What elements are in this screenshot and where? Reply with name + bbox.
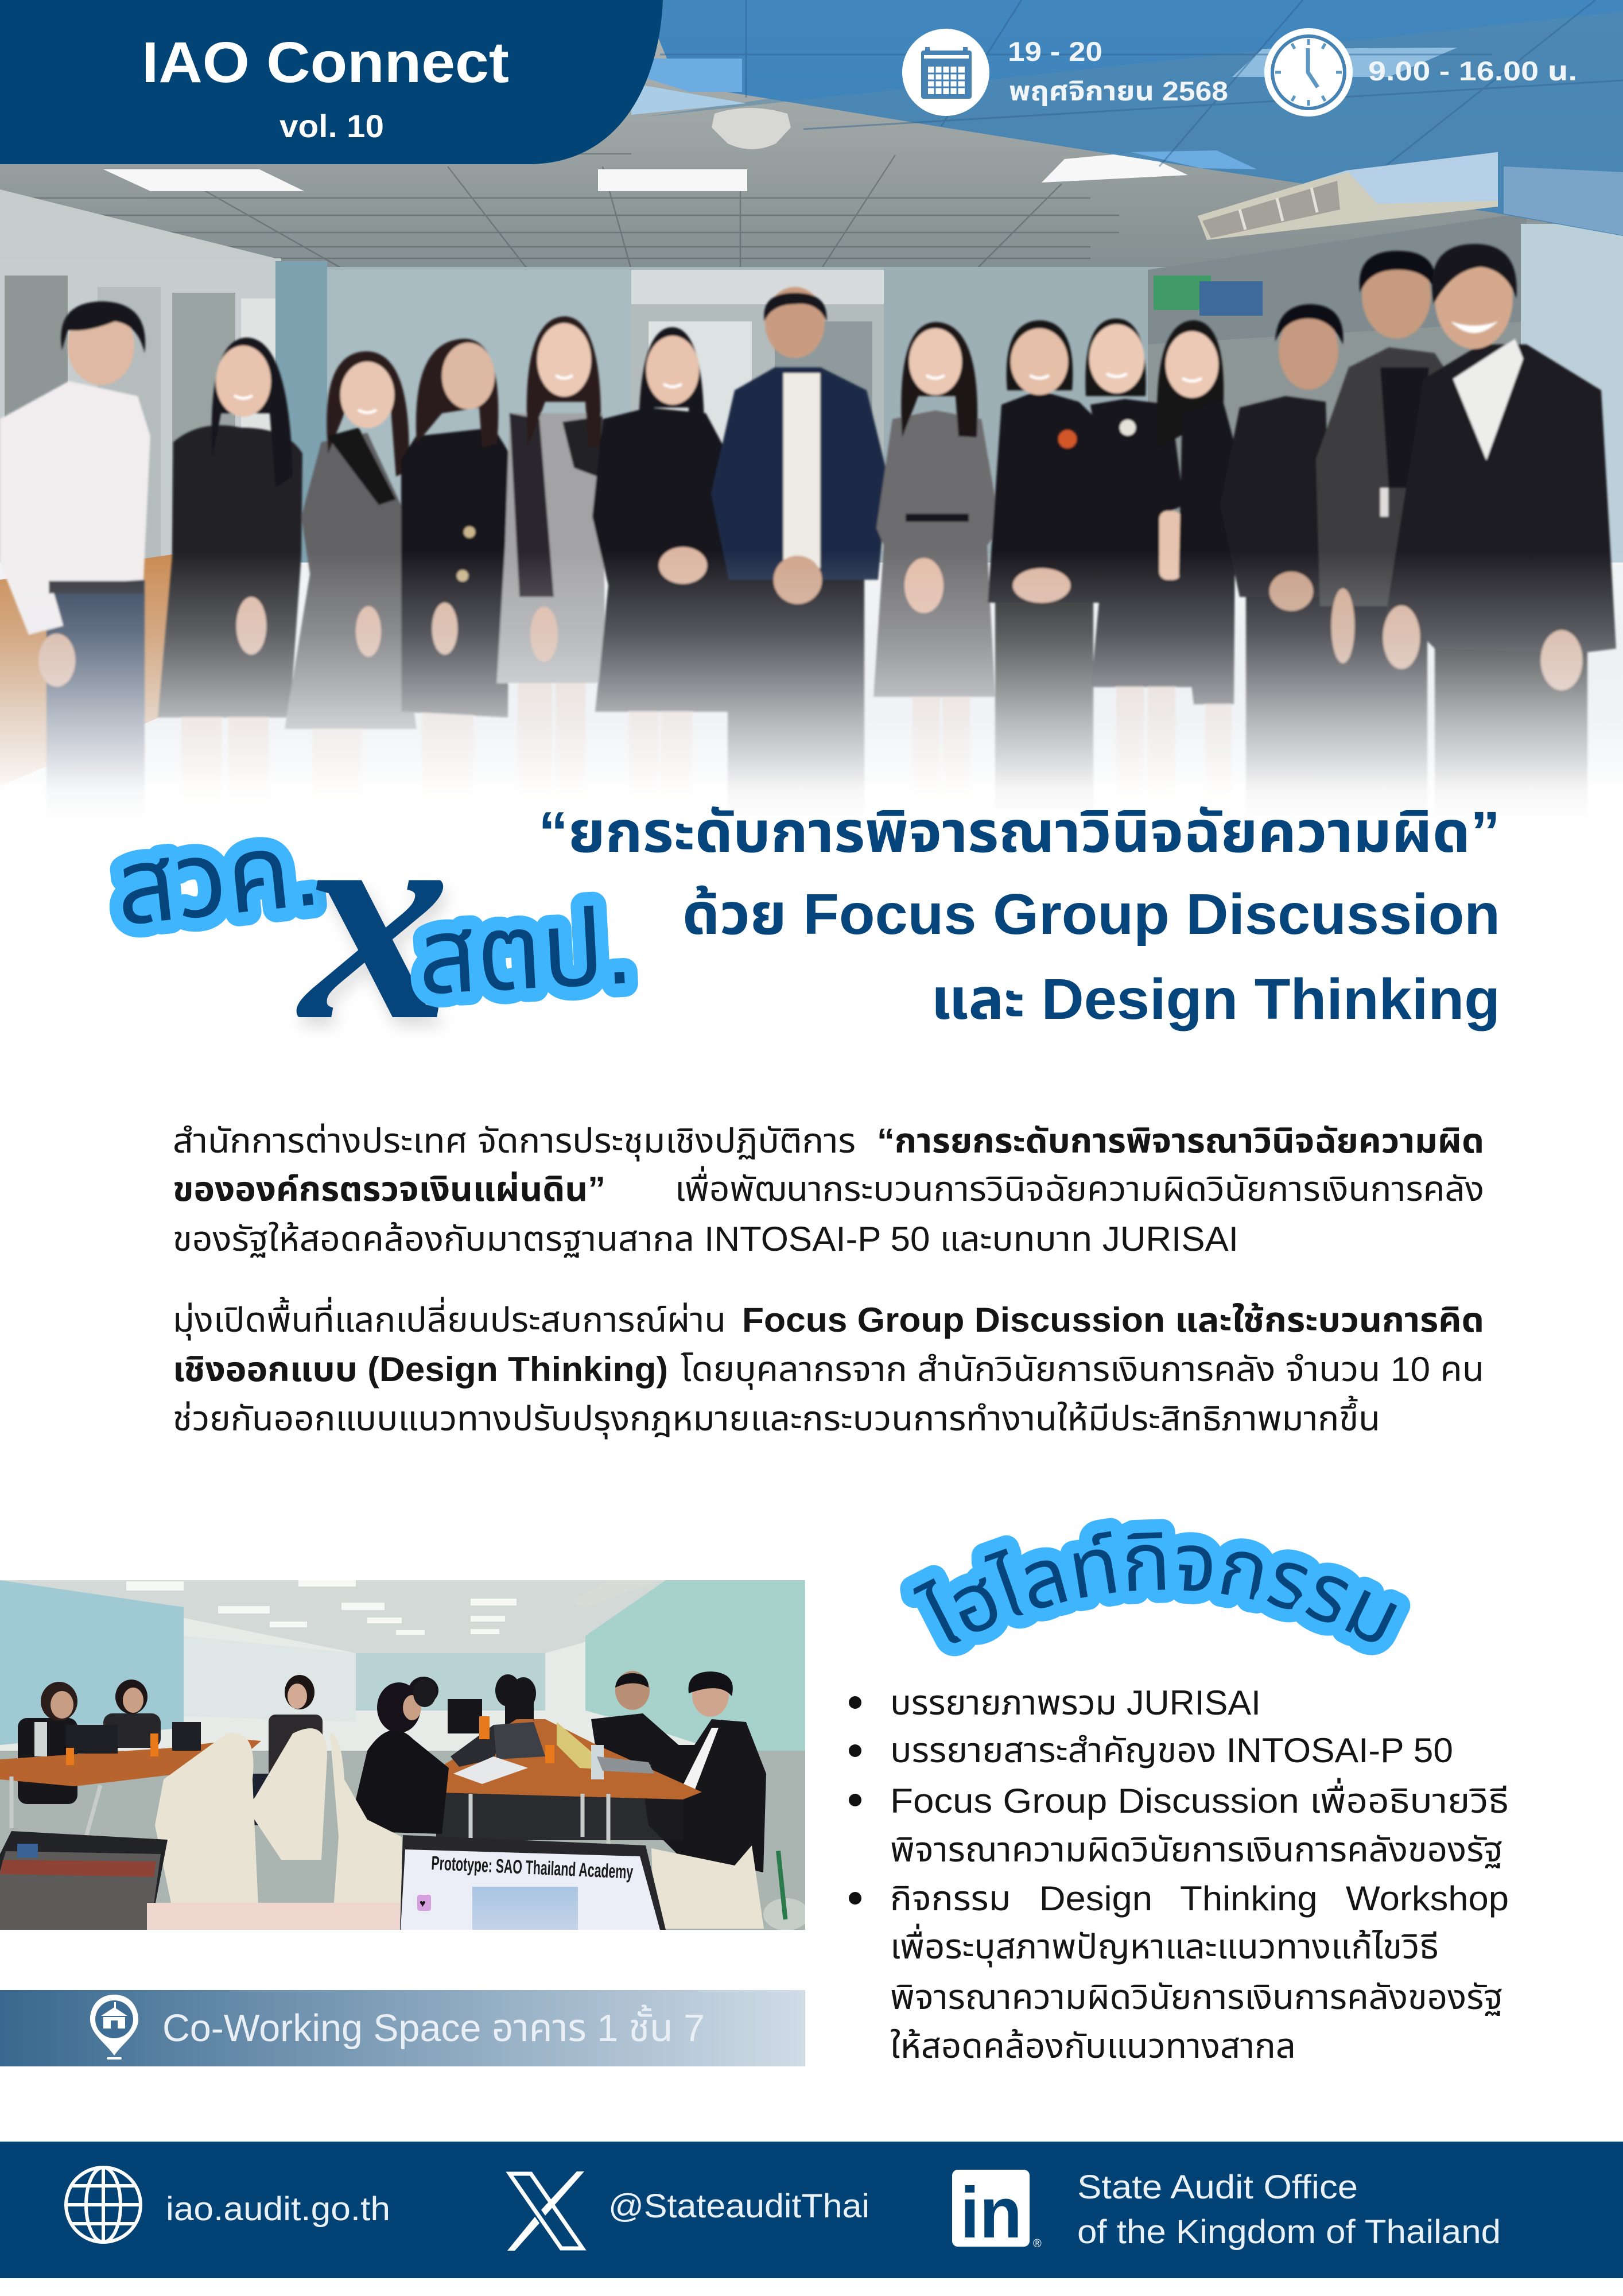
main title <box>538 800 1500 1031</box>
highlights heading: ไฮไลท์กิจกรรม <box>900 1518 1411 1657</box>
person 3: woman in grey dress <box>284 350 417 747</box>
logo word left: สวค. <box>110 809 325 948</box>
highlights list: พิจารณาความผิดวินัยการเงินการคลังของรัฐ <box>890 1978 1503 2016</box>
room background <box>0 0 1623 827</box>
paragraph 2: เชิงออกแบบ (Design Thinking) <box>173 1350 668 1389</box>
person 2: woman in polka-dot blouse <box>157 336 304 758</box>
woman in front of table <box>348 1680 449 1834</box>
plastic cup <box>763 1851 809 1930</box>
main title: และ Design Thinking <box>931 967 1500 1031</box>
person 4: woman in black coat <box>399 337 510 747</box>
ceiling lights <box>103 152 1188 191</box>
icon: location pin <box>90 1995 138 2060</box>
event time: 9.00 - 16.00 น. <box>1368 56 1577 86</box>
main title: “ยกระดับการพิจารณาวินิจฉัยความผิด” <box>538 800 1500 864</box>
paragraph 1: สำนักการต่างประเทศ จัดการประชุมเชิงปฏิบัติการ <box>173 1122 856 1162</box>
highlights list: บรรยายสาระสำคัญของ INTOSAI-P 50 <box>890 1731 1453 1770</box>
header panel <box>0 0 663 164</box>
paragraph 2: โดยบุคลากรจาก สำนักวินัยการเงินการคลัง จำนวน 10 คน <box>681 1350 1484 1390</box>
icon: calendar <box>902 29 989 116</box>
highlights list <box>849 1684 1509 2065</box>
group photo <box>0 0 1623 827</box>
event date: พฤศจิกายน 2568 <box>1009 76 1228 106</box>
person group with soft edges <box>0 244 1616 821</box>
organisation name: of the Kingdom of Thailand <box>1077 2213 1501 2251</box>
smoke detector <box>712 108 791 149</box>
logo x shadow: x <box>300 761 455 1091</box>
photo bottom fade <box>0 551 1623 822</box>
icon: LinkedIn: ® <box>1033 2237 1042 2250</box>
icon: clock <box>1264 28 1353 117</box>
people left <box>18 1675 323 1825</box>
person 1: man in white shirt <box>0 301 150 821</box>
organisation name: State Audit Office <box>1077 2169 1358 2206</box>
room <box>0 1580 805 1930</box>
person 12: man in black shirt <box>1220 304 1360 821</box>
main title: ด้วย Focus Group Discussion <box>682 882 1500 947</box>
logo x: x <box>296 752 451 1082</box>
location text: Co-Working Space อาคาร 1 ชั้น 7 <box>162 2004 705 2050</box>
person 9: woman in black jacket <box>988 320 1114 809</box>
paragraph 2: Focus Group Discussion และใช้กระบวนการคิด <box>742 1301 1484 1339</box>
air conditioner <box>1198 152 1623 240</box>
icon: LinkedIn: in <box>960 2173 1022 2253</box>
seated people back <box>409 1674 536 1739</box>
person 7: man in navy jacket <box>711 287 888 821</box>
paragraph 1: เพื่อพัฒนากระบวนการวินิจฉัยความผิดวินัยการเงินการคลัง <box>675 1166 1484 1208</box>
paragraph 1: ขององค์กรตรวจเงินแผ่นดิน” <box>173 1170 605 1208</box>
table legs <box>11 1777 608 1848</box>
person 14: man in black suit <box>1383 244 1616 821</box>
organisation name <box>1077 2169 1501 2251</box>
footer <box>0 2142 1623 2278</box>
chairs <box>155 1728 764 1929</box>
paragraph 2: ช่วยกันออกแบบแนวทางปรับปรุงกฎหมายและกระบวนการทำงานให้มีประสิทธิภาพมากขึ้น <box>173 1395 1380 1440</box>
paragraph 2 <box>173 1297 1484 1440</box>
right laptop with prototype screen <box>400 1835 666 1930</box>
right laptop with prototype screen: ♥ <box>420 1898 426 1909</box>
highlights list: ให้สอดคล้องกับแนวทางสากล <box>890 2027 1296 2065</box>
event date <box>1008 36 1228 106</box>
highlights list: กิจกรรม Design Thinking Workshop <box>890 1879 1509 1918</box>
twitter handle: @StateauditThai <box>608 2188 869 2225</box>
logo word right: สตป. <box>415 887 635 1017</box>
paragraph 1 <box>173 1122 1484 1258</box>
event date: 19 - 20 <box>1008 36 1102 67</box>
person 10: woman in black dress <box>1085 319 1202 821</box>
paragraph 1: ของรัฐให้สอดคล้องกับมาตรฐานสากล INTOSAI-P 50 และบทบาท JURISAI <box>173 1220 1238 1258</box>
highlights list: บรรยายภาพรวม JURISAI <box>890 1684 1261 1722</box>
highlights list: พิจารณาความผิดวินัยการเงินการคลังของรัฐ <box>890 1830 1503 1869</box>
icon: X logo <box>507 2171 584 2251</box>
person 8: woman in plaid dress <box>873 322 1000 821</box>
workshop photo <box>0 1580 809 1930</box>
header volume: vol. 10 <box>279 108 384 144</box>
person 5: woman in houndstooth dress <box>495 315 607 747</box>
icon: LinkedIn <box>952 2170 1042 2253</box>
person 13: man in grey blazer <box>1316 251 1458 821</box>
right laptop with prototype screen: Prototype: SAO Thailand Academy <box>431 1852 634 1883</box>
website: iao.audit.go.th <box>166 2190 390 2228</box>
person 11: woman in black <box>1157 320 1236 818</box>
paragraph 1: “การยกระดับการพิจารณาวินิจฉัยความผิด <box>877 1122 1484 1160</box>
blue overlay <box>631 0 1623 236</box>
highlights list: Focus Group Discussion เพื่ออธิบายวิธี <box>890 1778 1509 1820</box>
location bar <box>0 1990 805 2066</box>
logo: SAO x FIO <box>110 752 635 1091</box>
men at right table <box>436 1671 766 1872</box>
person 6: woman in black blazer <box>592 327 732 821</box>
header title: IAO Connect <box>142 30 509 95</box>
left table <box>0 1722 261 1786</box>
faces details <box>235 374 1201 413</box>
left laptop <box>0 1831 168 1930</box>
highlights list: เพื่อระบุสภาพปัญหาและแนวทางแก้ไขวิธี <box>890 1923 1439 1968</box>
icon: globe <box>66 2167 141 2242</box>
paragraph 2: มุ่งเปิดพื้นที่แลกเปลี่ยนประสบการณ์ผ่าน <box>173 1297 726 1341</box>
right table <box>421 1716 702 1799</box>
table cloth <box>147 1903 400 1930</box>
